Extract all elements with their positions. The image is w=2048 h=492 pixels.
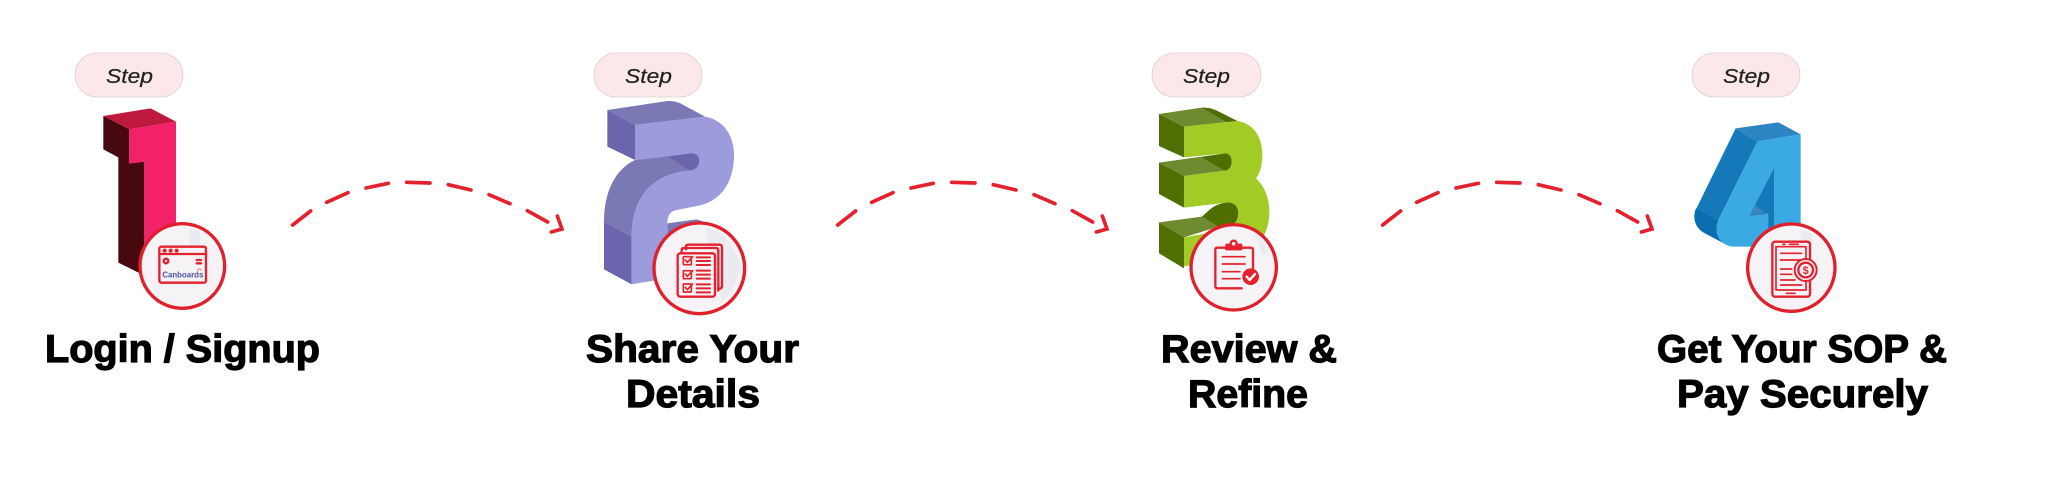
step label pill 4: Step <box>1723 65 1770 88</box>
step label pill 4 <box>1692 53 1800 97</box>
arrow 3 to 4 <box>1383 182 1652 232</box>
step label pill 3: Step <box>1183 65 1230 88</box>
step label pill 1 <box>75 53 183 97</box>
icon: browser window with Canboards logo: Canboards <box>162 269 204 279</box>
numeral 2 <box>604 101 734 284</box>
step label pill 2: Step <box>625 65 672 88</box>
icon: tablet invoice with dollar coin: $ <box>1803 265 1809 277</box>
panel: step 3 <box>1152 53 1337 416</box>
numeral 3 <box>1159 108 1269 268</box>
heading: Get Your SOP & Pay Securely <box>1657 328 1947 416</box>
step label pill 1: Step <box>106 65 153 88</box>
panel: step 4 <box>1657 53 1947 416</box>
numeral 4 <box>1694 122 1801 247</box>
icon: clipboard with check badge <box>1191 225 1276 310</box>
icon: stacked checklists <box>654 223 745 314</box>
icon: tablet invoice with dollar coin <box>1748 224 1835 311</box>
heading: Review & Refine <box>1161 328 1337 416</box>
heading: Review & Refine: Review & <box>1161 328 1337 371</box>
numeral 1 <box>103 108 176 280</box>
heading: Review & Refine: Refine <box>1188 373 1308 416</box>
step label pill 3 <box>1152 53 1261 97</box>
heading: Share Your Details: Share Your <box>586 328 799 371</box>
arrow 2 to 3 <box>838 182 1107 232</box>
heading: Share Your Details: Details <box>626 373 760 416</box>
panel: step 2 <box>586 53 799 416</box>
heading: Login / Signup: Login / Signup <box>45 328 320 371</box>
arrow 1 to 2 <box>293 182 562 232</box>
heading: Get Your SOP & Pay Securely: Pay Securely <box>1677 373 1929 416</box>
heading: Get Your SOP & Pay Securely: Get Your SOP & <box>1657 328 1947 371</box>
heading: Share Your Details <box>586 328 799 416</box>
step label pill 2 <box>594 53 702 97</box>
icon: browser window with Canboards logo <box>140 224 225 308</box>
panel: step 1 <box>45 53 320 371</box>
